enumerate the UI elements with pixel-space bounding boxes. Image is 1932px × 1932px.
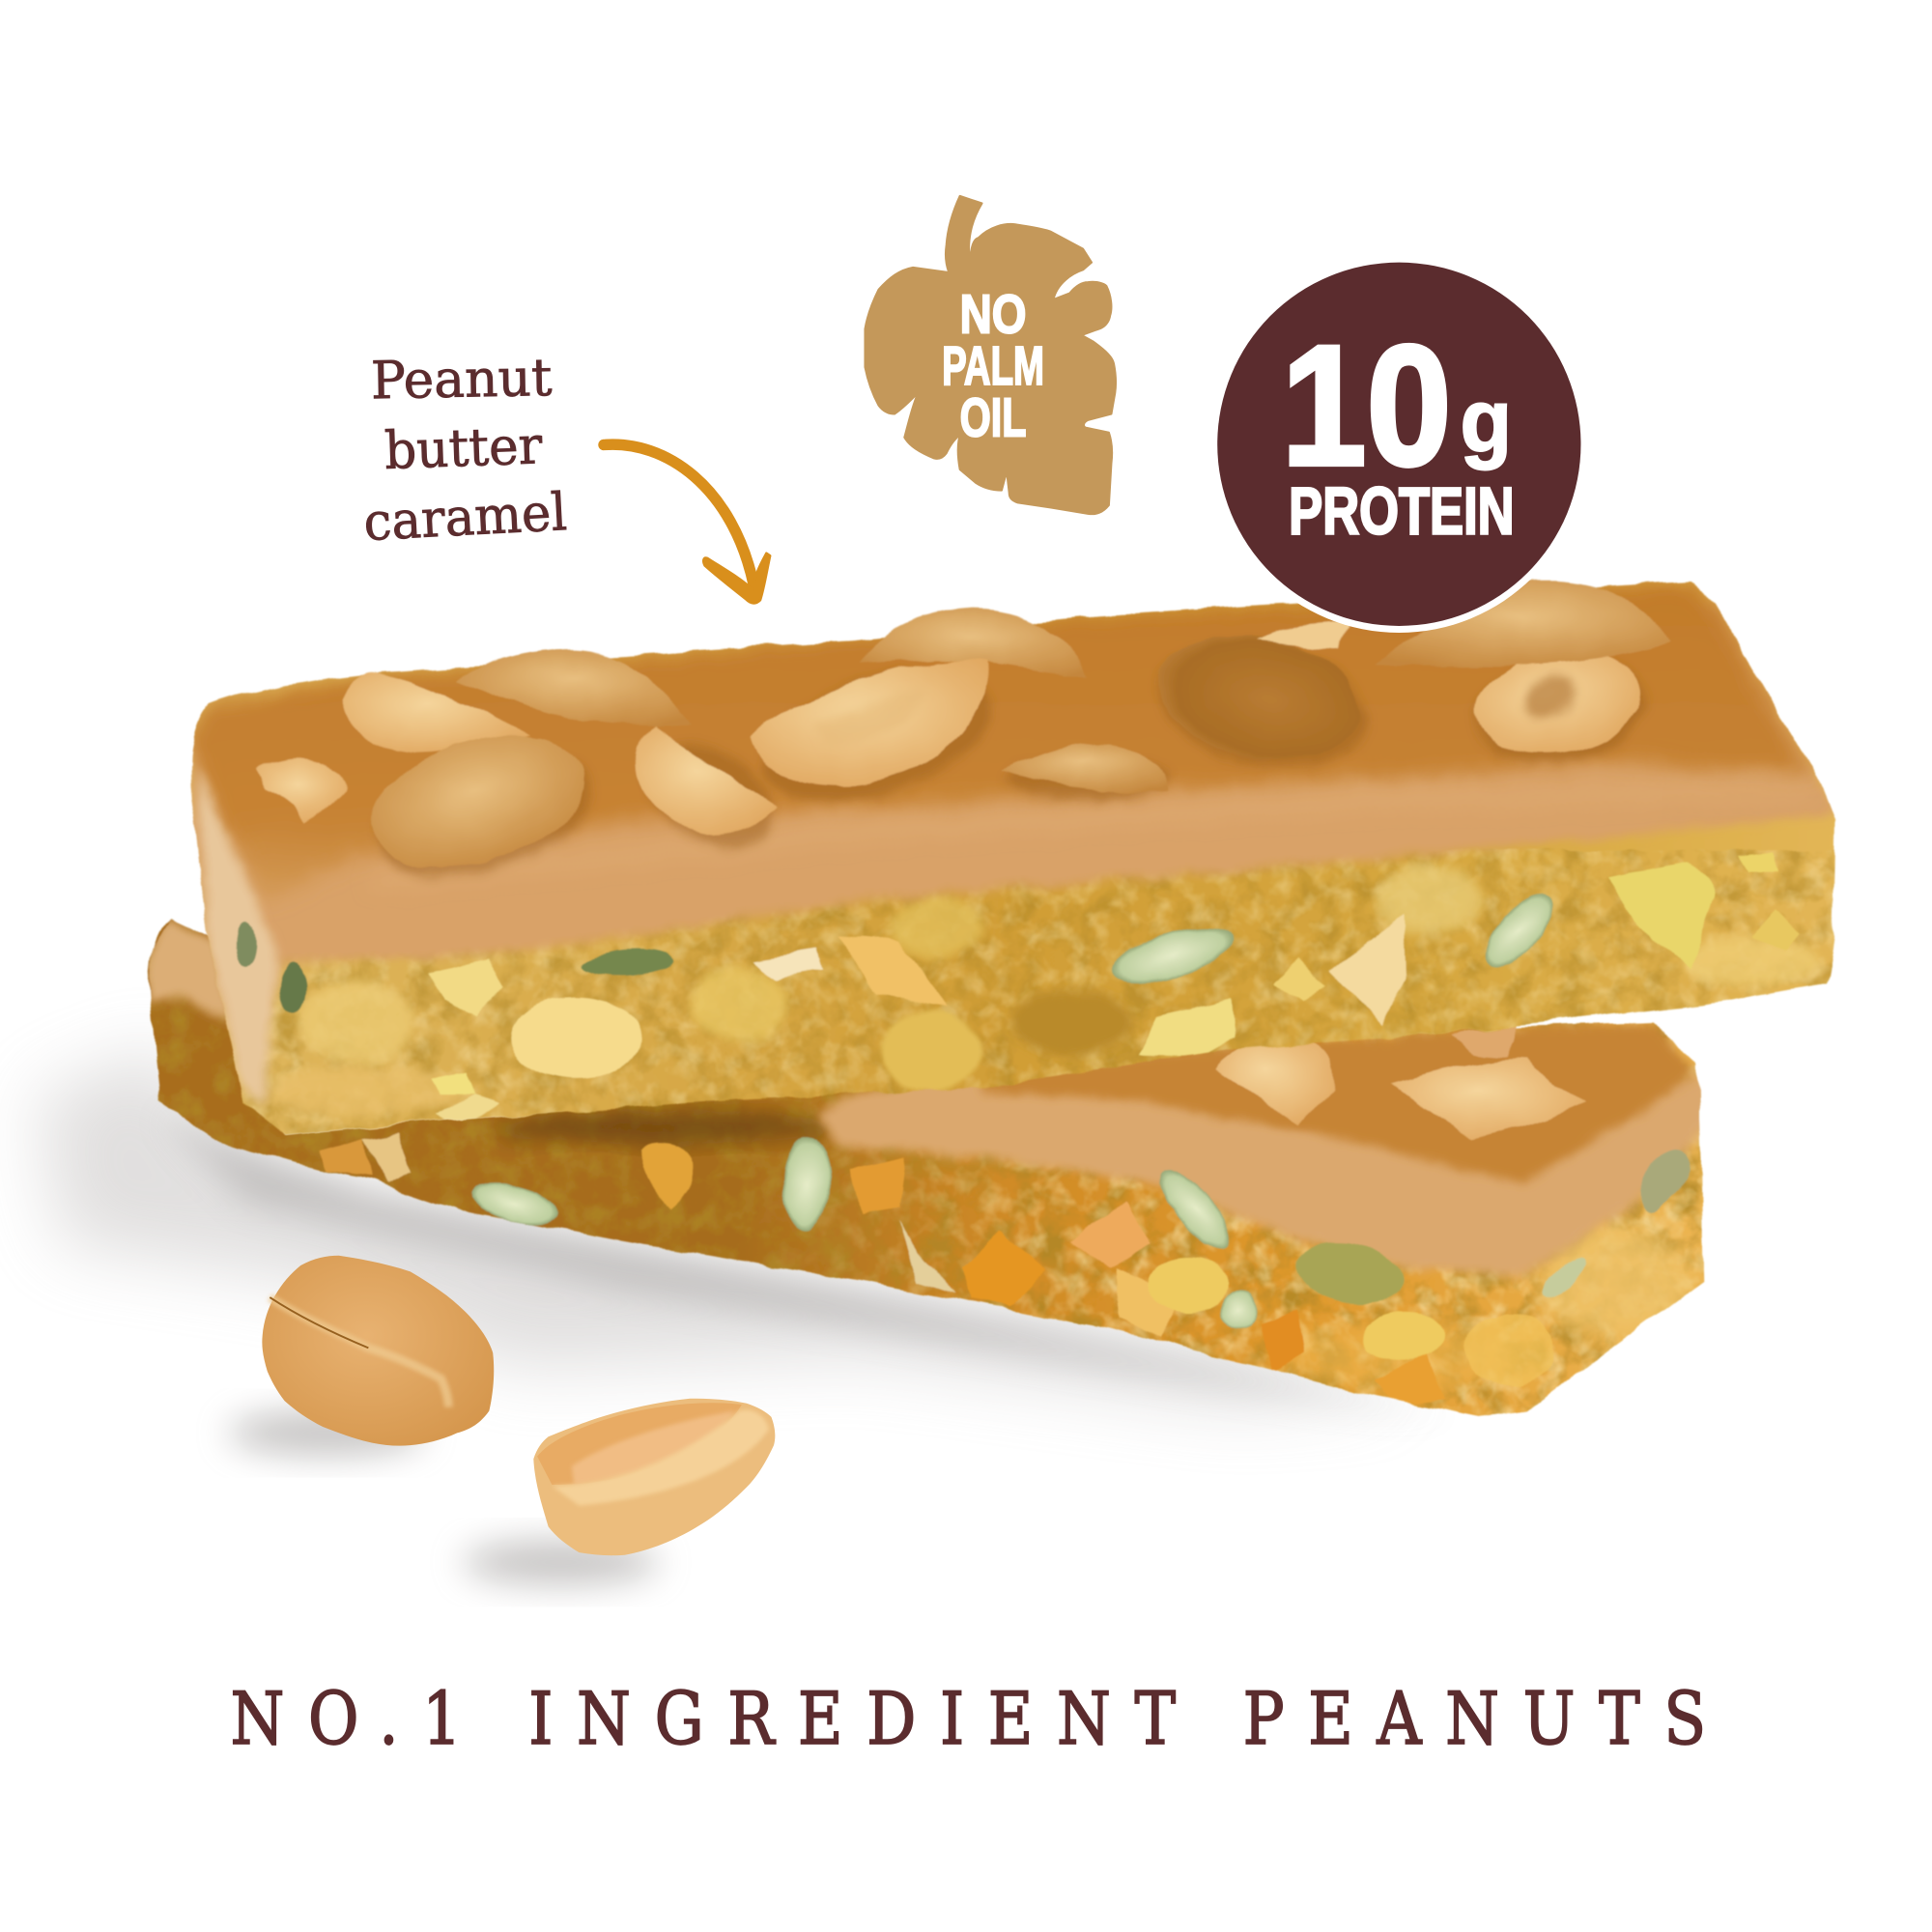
upper bar bbox=[185, 579, 1848, 1146]
lower bar caramel front bbox=[818, 1060, 1707, 1276]
label: peanut butter caramel: Peanut bbox=[370, 347, 553, 411]
lower bar left caramel end bbox=[148, 918, 234, 1023]
label: peanut butter caramel: butter bbox=[384, 414, 544, 481]
leaf text bbox=[942, 283, 1044, 448]
peanut: half bbox=[462, 1399, 775, 1584]
pumpkin seeds lower bbox=[783, 1135, 831, 1231]
top peanuts bbox=[256, 581, 1671, 892]
upper bar seeds bbox=[1106, 915, 1239, 995]
leaf text: PALM bbox=[942, 335, 1044, 396]
lower bar bbox=[124, 912, 1725, 1430]
upper bar crumb bbox=[185, 850, 1848, 1146]
upper bar caramel front bbox=[191, 715, 1833, 984]
left end highlight bbox=[197, 764, 277, 1109]
label: peanut butter caramel: caramel bbox=[362, 481, 568, 553]
badge: 10g protein: 10 bbox=[1282, 310, 1452, 501]
peanut: whole bbox=[228, 1256, 494, 1455]
leaf text: OIL bbox=[960, 387, 1026, 448]
badge: 10g protein bbox=[1210, 256, 1587, 633]
infographic canvas bbox=[23, 195, 1836, 1746]
badge: 10g protein: PROTEIN bbox=[1289, 473, 1515, 548]
lower bar caramel top bbox=[974, 1023, 1698, 1184]
lower bar top nuts bbox=[1213, 1037, 1334, 1123]
lower bar crumb shading bbox=[157, 1003, 1703, 1414]
arrow bbox=[604, 444, 770, 603]
bright band below top edge bbox=[370, 788, 1811, 881]
upper bar caramel top bbox=[185, 579, 1811, 899]
label: peanut butter caramel bbox=[362, 347, 568, 553]
upper bar inclusions bbox=[511, 998, 642, 1079]
title: no.1 ingredient peanuts: NO.1 INGREDIENT PEANUTS bbox=[231, 1677, 1706, 1761]
cast shadow under bars bbox=[37, 1047, 1454, 1417]
leaf text: NO bbox=[960, 283, 1026, 344]
badge: no palm oil leaf bbox=[865, 196, 1116, 514]
badge: 10g protein: g bbox=[1460, 372, 1512, 470]
top peanut contact shadows bbox=[360, 625, 1655, 900]
orange chunks bbox=[640, 1141, 695, 1210]
